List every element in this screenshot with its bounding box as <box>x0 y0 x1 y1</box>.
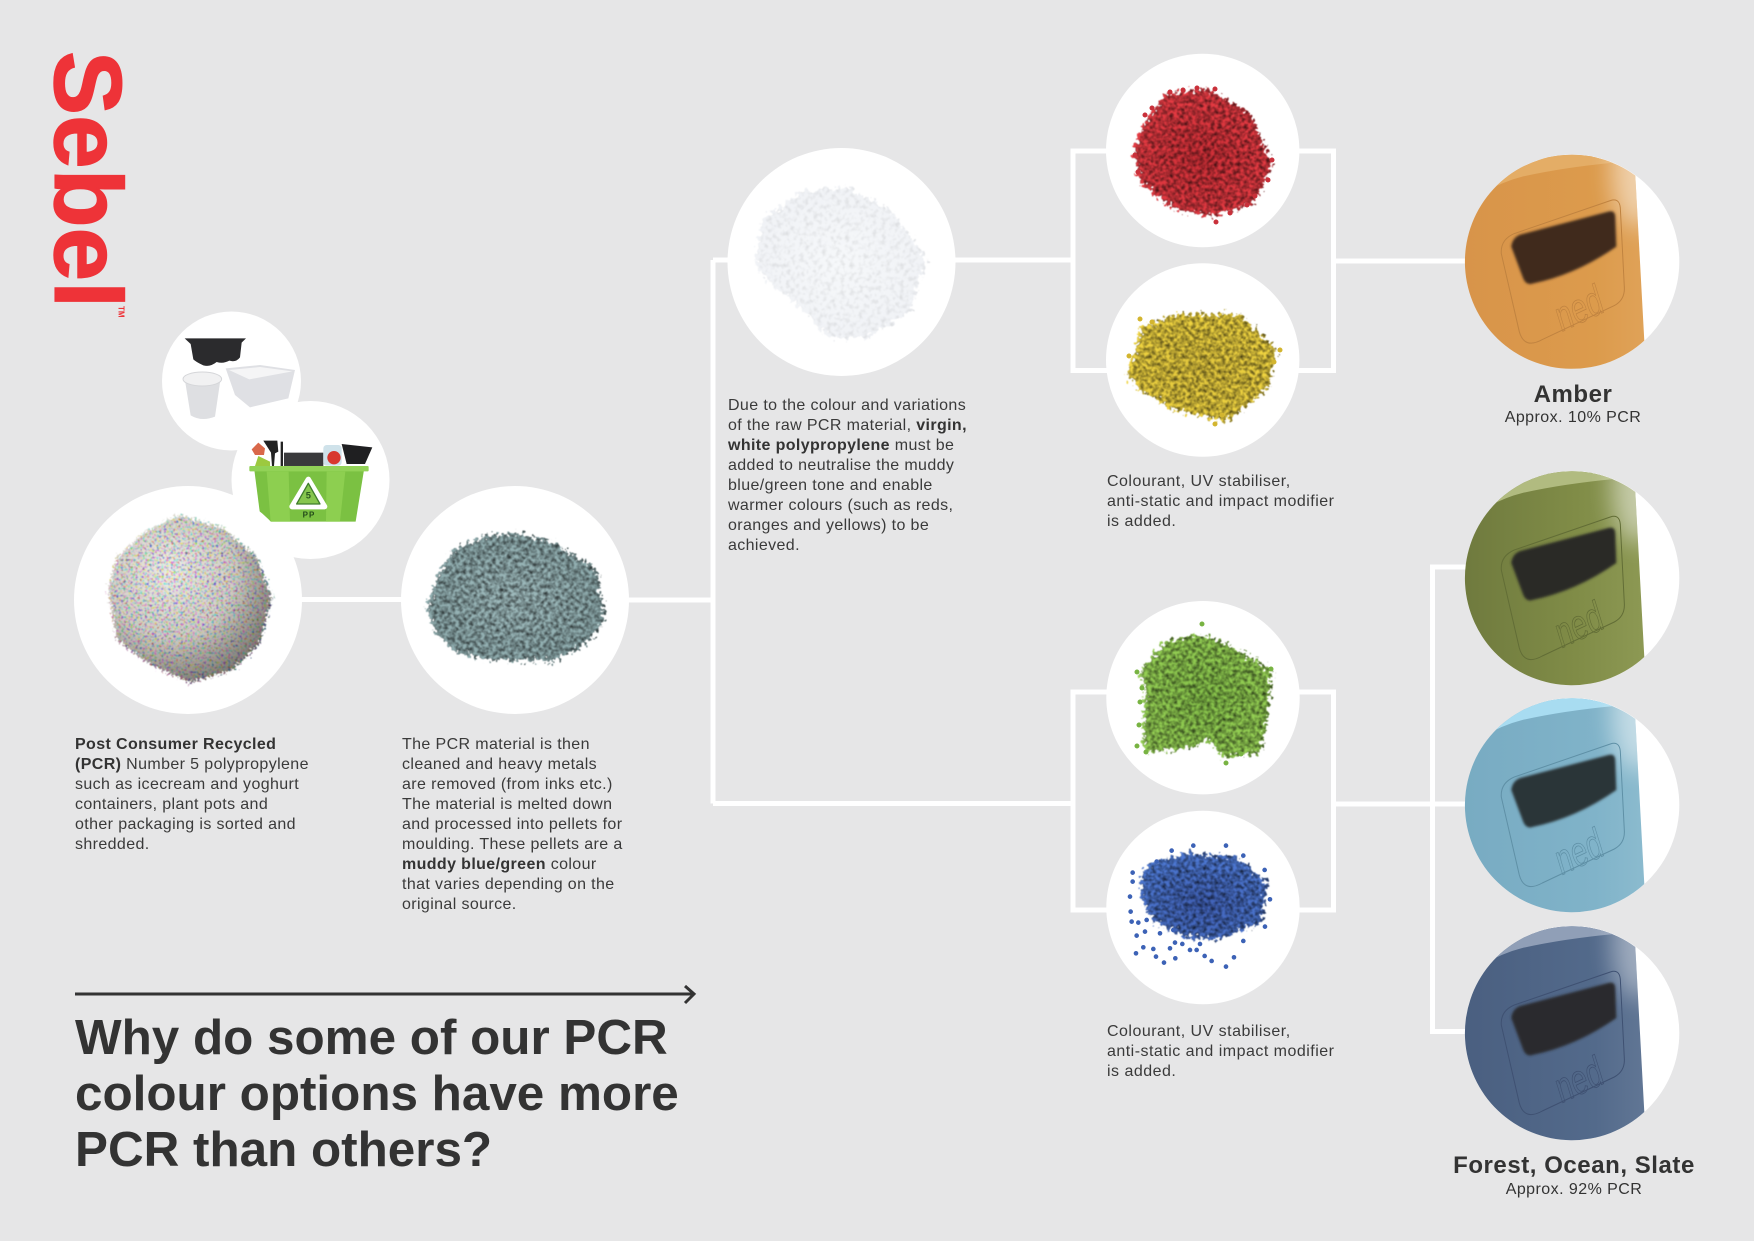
icon: white tub <box>226 365 295 407</box>
text: additives lower: Colourant, UV stabiliser, <box>1107 1023 1291 1040</box>
label: Amber: Approx. 10% PCR <box>1505 409 1641 426</box>
swatch: Amber chair <box>1464 154 1680 369</box>
swatch: Slate chair: ned <box>1546 1047 1612 1111</box>
text: post consumer recycled: other packaging is sorted and <box>75 816 296 833</box>
text: virgin white polypropylene <box>728 397 967 554</box>
text: virgin white polypropylene: warmer colours (such as reds, <box>728 497 953 514</box>
icon: black plant tray <box>185 338 246 366</box>
text: cleaning and pellets: are removed (from inks etc.) <box>402 776 613 793</box>
swatch: Slate chair <box>1464 926 1680 1140</box>
text: cleaning and pellets <box>402 736 623 913</box>
circle: yellow colourant pellets <box>1106 263 1299 457</box>
swatch: Forest chair <box>1464 471 1680 686</box>
swatch: Amber chair: ned <box>1546 276 1612 340</box>
text: post consumer recycled <box>75 736 309 853</box>
text: cleaning and pellets: cleaned and heavy metals <box>402 756 597 773</box>
circle: red colourant pellets <box>1106 54 1299 247</box>
text: additives upper <box>1107 473 1334 530</box>
text: cleaning and pellets: The material is melted down <box>402 796 612 813</box>
circle: green colourant pellets <box>1106 601 1300 794</box>
text: cleaning and pellets: moulding. These pellets are a <box>402 836 623 853</box>
label: Forest, Ocean, Slate: Approx. 92% PCR <box>1506 1181 1642 1198</box>
icon: items in bin <box>252 441 372 466</box>
swatch: Ocean chair <box>1464 698 1680 912</box>
circle: shredded PCR material <box>74 486 302 714</box>
text: virgin white polypropylene: achieved. <box>728 537 800 554</box>
circle: packaging waste <box>162 312 301 450</box>
text: cleaning and pellets: that varies depending on the <box>402 876 615 893</box>
connector lines <box>300 151 1470 1032</box>
logo: Sebel: TM <box>116 306 126 318</box>
title: Why do some of our PCR <box>75 1010 668 1065</box>
text: virgin white polypropylene: Due to the colour and variations <box>728 397 966 414</box>
text: virgin white polypropylene: oranges and yellows) to be <box>728 517 929 534</box>
text: post consumer recycled: containers, plant pots and <box>75 796 268 813</box>
text: additives upper: is added. <box>1107 513 1176 530</box>
label: Forest, Ocean, Slate <box>1453 1152 1695 1198</box>
logo: Sebel: Sebel <box>34 51 141 308</box>
circle: recycling bin <box>232 401 390 559</box>
icon: recycling symbol 5 PP: 5 <box>306 491 311 501</box>
swatch: Ocean chair: ned <box>1546 819 1612 883</box>
text: additives upper: Colourant, UV stabiliser, <box>1107 473 1291 490</box>
text: additives lower: anti-static and impact modifier <box>1107 1043 1334 1060</box>
text: post consumer recycled: such as icecream and yoghurt <box>75 776 299 793</box>
title <box>75 1010 679 1177</box>
text: virgin white polypropylene: added to neutralise the muddy <box>728 457 954 474</box>
icon: white bucket <box>183 372 222 419</box>
icon: green bin body <box>254 470 364 522</box>
circle: muddy blue/green pellets <box>401 486 629 714</box>
text: additives lower <box>1107 1023 1334 1080</box>
text: virgin white polypropylene: blue/green tone and enable <box>728 477 933 494</box>
icon: recycling symbol 5 PP <box>292 479 325 519</box>
text: cleaning and pellets: and processed into pellets for <box>402 816 622 833</box>
text: virgin white polypropylene: white polypropylene must be <box>728 437 954 454</box>
text: additives lower: is added. <box>1107 1063 1176 1080</box>
text: additives upper: anti-static and impact modifier <box>1107 493 1334 510</box>
text: cleaning and pellets: The PCR material is then <box>402 736 590 753</box>
text: cleaning and pellets: original source. <box>402 896 517 913</box>
text: cleaning and pellets: muddy blue/green colour <box>402 856 597 873</box>
title: PCR than others? <box>75 1122 492 1177</box>
text: post consumer recycled: shredded. <box>75 836 150 853</box>
swatch: Forest chair: ned <box>1546 592 1612 656</box>
title: colour options have more <box>75 1066 679 1121</box>
circle: blue colourant pellets <box>1106 811 1300 1004</box>
icon: recycling symbol 5 PP: PP <box>303 510 315 519</box>
text: virgin white polypropylene: of the raw PCR material, virgin, <box>728 417 967 434</box>
label: Amber <box>1504 381 1641 426</box>
label: Amber: Amber <box>1534 381 1612 408</box>
text: post consumer recycled: (PCR) Number 5 polypropylene <box>75 756 309 773</box>
text: post consumer recycled: Post Consumer Recycled <box>75 736 276 753</box>
circle: virgin white polypropylene pellets <box>728 148 956 376</box>
label: Forest, Ocean, Slate: Forest, Ocean, Slate <box>1453 1152 1695 1179</box>
arrow <box>75 986 694 1003</box>
